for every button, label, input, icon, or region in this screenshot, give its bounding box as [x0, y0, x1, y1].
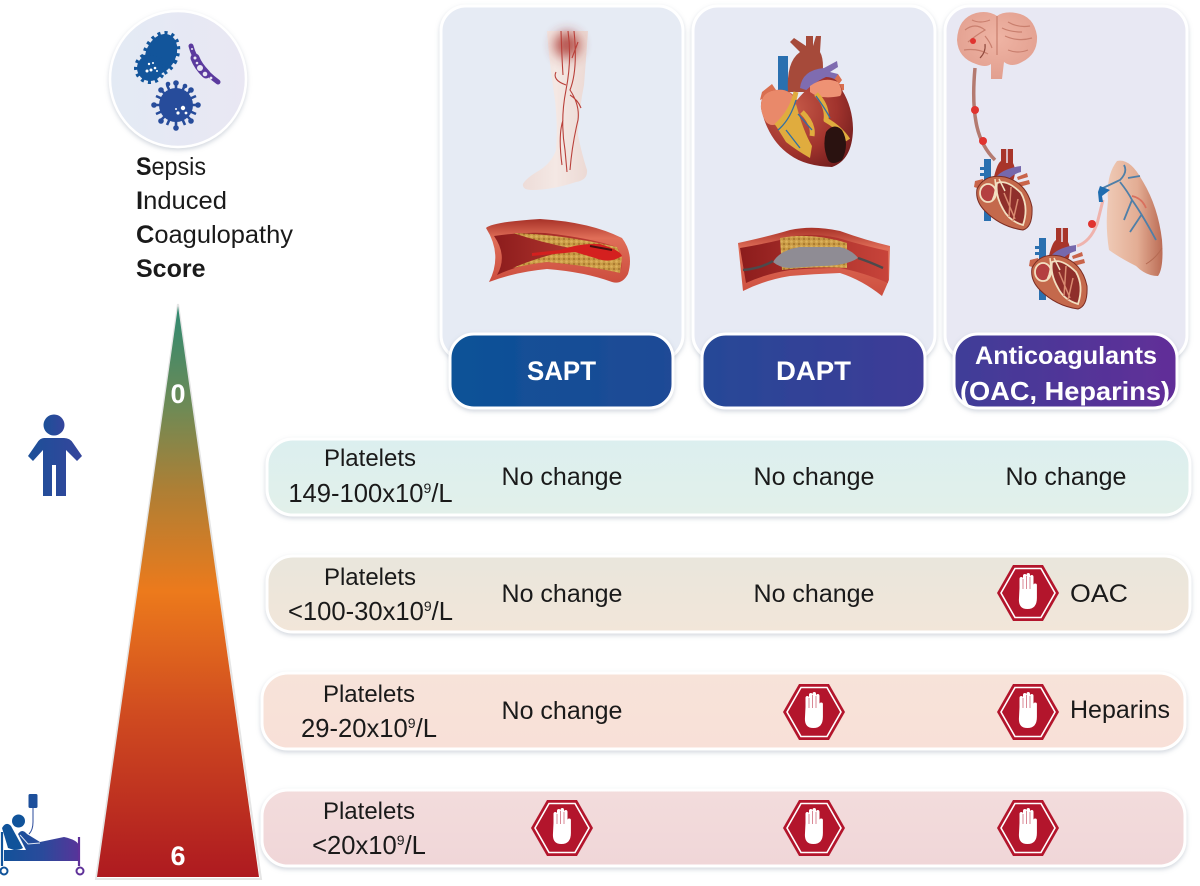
row label: 9 — [397, 832, 405, 848]
label: SAPT: SAPT — [527, 356, 596, 386]
icon: sepsis pathogens — [110, 11, 246, 147]
illustration: heart with infarct — [760, 36, 853, 167]
illustration: heart section lower — [1029, 228, 1087, 309]
row label: /L — [431, 480, 453, 508]
illustration: artery with thrombus — [486, 219, 630, 283]
icon: stop OAC — [997, 565, 1059, 621]
row: platelets 149-100 — [267, 439, 1190, 515]
heparins label: Heparins — [1070, 696, 1170, 724]
OAC label: OAC — [1070, 580, 1128, 608]
SAPT value: No change — [502, 580, 622, 608]
anticoagulant value: No change — [1006, 463, 1126, 491]
title: SIC score: Coagulopathy — [136, 221, 294, 249]
label: DAPT: DAPT — [776, 356, 852, 386]
row label: Platelets — [324, 564, 416, 591]
title: SIC score — [136, 153, 294, 283]
row label: 29-20x10 — [301, 715, 437, 743]
row label: Platelets — [323, 798, 415, 825]
icon: stop heparins — [997, 684, 1059, 740]
icon: virus — [151, 80, 201, 131]
row label: Platelets — [324, 445, 416, 472]
icon: stop DAPT — [783, 684, 845, 740]
DAPT value: No change — [754, 580, 874, 608]
illustration: lung with pulmonary embolism — [1077, 161, 1162, 276]
label: Anticoagulants (OAC, Heparins): Anticoagulants — [975, 342, 1157, 370]
icon: rod bacterium — [136, 27, 185, 82]
icon: standing person — [28, 414, 82, 496]
row label: /L — [416, 715, 437, 743]
icon: stop SAPT — [531, 800, 593, 856]
title: SIC score: Score — [136, 255, 206, 283]
icon: stop DAPT — [783, 800, 845, 856]
illustration: artery with balloon stent — [738, 228, 890, 296]
row label: Platelets — [323, 681, 415, 708]
row: platelets 29-20 — [262, 673, 1185, 749]
label: Anticoagulants (OAC, Heparins): (OAC, Heparins) — [960, 376, 1170, 406]
score value 6: 6 — [170, 841, 186, 871]
row: platelets <20 — [262, 790, 1185, 866]
score value 0: 0 — [170, 379, 186, 409]
row label: <20x10 — [312, 832, 426, 860]
row label: 9 — [424, 480, 432, 496]
illustration: embolus pathway to brain — [971, 68, 995, 160]
illustration: leg with arterial thrombosis — [523, 31, 588, 190]
row label: 9 — [424, 598, 432, 614]
DAPT value: No change — [754, 463, 874, 491]
row: platelets <100-30 — [267, 556, 1190, 632]
row label: /L — [432, 598, 453, 626]
panel: DAPT — [693, 6, 935, 408]
panel: SAPT — [441, 6, 683, 408]
label: Anticoagulants (OAC, Heparins) — [954, 334, 1177, 408]
pyramid: SIC score gradient — [96, 304, 261, 879]
row label: 9 — [408, 715, 416, 731]
illustration: brain — [957, 12, 1037, 79]
row label: 149-100x10 — [288, 480, 453, 508]
SAPT value: No change — [502, 463, 622, 491]
icon: chain bacterium — [191, 46, 218, 82]
label: DAPT — [702, 334, 925, 408]
SAPT value: No change — [502, 697, 622, 725]
icon: patient in bed — [0, 794, 84, 874]
row label: /L — [405, 832, 426, 860]
label: SAPT — [450, 334, 673, 408]
illustration: heart section upper — [974, 149, 1032, 230]
title: SIC score: Sepsis — [136, 153, 206, 181]
row label: <100-30x10 — [288, 598, 453, 626]
title: SIC score: Induced — [136, 187, 227, 215]
icon: stop anticoagulants — [997, 800, 1059, 856]
panel: Anticoagulants — [945, 6, 1187, 408]
